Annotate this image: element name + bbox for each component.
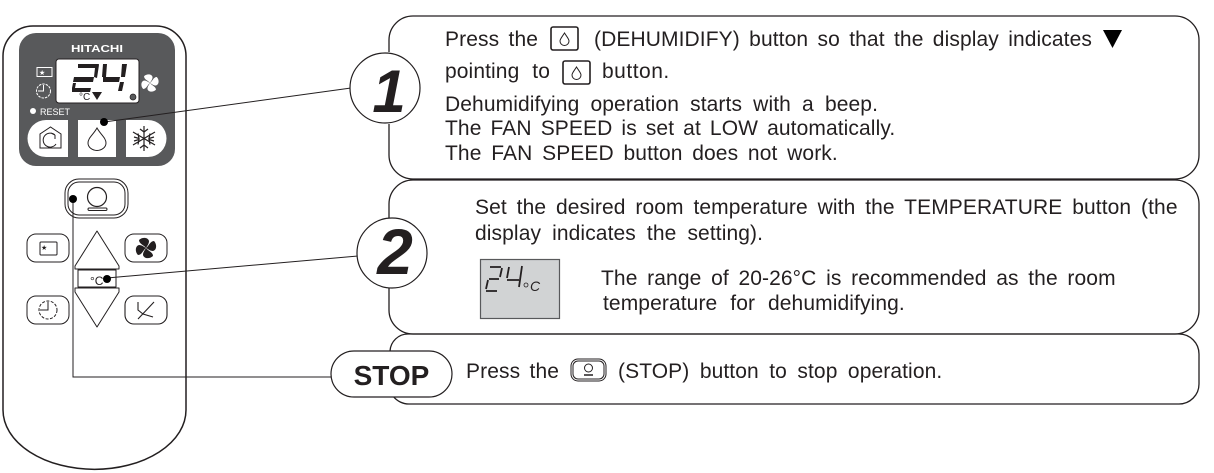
icon: star mode bbox=[37, 68, 52, 77]
leader line: step 2 bbox=[103, 256, 358, 283]
reset label: RESET bbox=[40, 107, 71, 117]
icon: dehumidify button inline bbox=[551, 27, 578, 50]
button: swing bbox=[125, 296, 167, 324]
leader line: step 1 bbox=[100, 88, 351, 126]
display digits 24 bbox=[72, 64, 127, 92]
button: fan speed bbox=[125, 234, 167, 262]
panel: step 1 box bbox=[389, 16, 1199, 179]
icon: timer bbox=[36, 84, 50, 98]
button: stop bbox=[65, 179, 128, 218]
step badge 2 bbox=[357, 216, 427, 288]
button: temperature bbox=[75, 231, 119, 327]
button: cool bbox=[126, 120, 166, 157]
icon: fan bbox=[141, 74, 159, 92]
step 1 instructions: (DEHUMIDIFY) button so that the display indicates bbox=[594, 28, 1092, 51]
control panel bbox=[19, 33, 175, 166]
step 2 instructions: display indicates the setting). bbox=[475, 222, 763, 245]
stop instructions: Press the bbox=[466, 360, 559, 383]
step badge 1: 1 bbox=[372, 58, 406, 125]
step 1 instructions: The FAN SPEED button does not work. bbox=[445, 142, 838, 165]
stop badge: STOP bbox=[354, 360, 429, 391]
panel: stop box bbox=[390, 334, 1199, 404]
display celsius and pointer: °C bbox=[79, 92, 90, 103]
stop badge bbox=[331, 351, 452, 397]
remote control bbox=[3, 26, 186, 469]
leader line: stop bbox=[69, 195, 331, 377]
button: auto mode bbox=[28, 120, 68, 157]
icon: star mode: ★ bbox=[39, 69, 45, 77]
step 2 instructions: Set the desired room temperature with the TEMPERATURE button (the bbox=[475, 196, 1178, 219]
temperature display example: C bbox=[530, 278, 541, 294]
pointer triangle bbox=[1103, 30, 1122, 48]
icon: dehumidify button inline second bbox=[563, 61, 590, 84]
step 2 instructions: The range of 20-26°C is recommended as the room bbox=[601, 267, 1116, 290]
step badge 2: 2 bbox=[376, 216, 413, 288]
stop instructions bbox=[466, 359, 942, 383]
panel: step 2 box bbox=[389, 180, 1199, 334]
step 2 instructions: temperature for dehumidifying. bbox=[603, 292, 905, 315]
step 1 instructions: Press the bbox=[445, 28, 538, 51]
remote body bbox=[3, 26, 186, 469]
brand name: HITACHI bbox=[71, 44, 123, 55]
step 2 instructions bbox=[475, 196, 1178, 318]
step 1 instructions bbox=[445, 27, 1122, 165]
step badge 1 bbox=[350, 53, 420, 125]
step 1 instructions: Dehumidifying operation starts with a beep. bbox=[445, 93, 878, 116]
step 1 instructions: The FAN SPEED is set at LOW automatically. bbox=[445, 117, 895, 140]
button: star: ★ bbox=[41, 244, 47, 252]
button: temperature: °C bbox=[90, 274, 104, 288]
icon: stop button inline bbox=[571, 359, 606, 381]
temperature display example bbox=[480, 260, 560, 318]
display celsius and pointer bbox=[79, 92, 136, 103]
stop instructions: (STOP) button to stop operation. bbox=[618, 360, 942, 383]
step 1 instructions: button. bbox=[602, 60, 670, 83]
button: dehumidify bbox=[78, 120, 116, 157]
button: timer bbox=[27, 296, 69, 324]
display bbox=[56, 59, 139, 103]
step 1 instructions: pointing to bbox=[445, 60, 550, 83]
button: star bbox=[27, 234, 69, 262]
